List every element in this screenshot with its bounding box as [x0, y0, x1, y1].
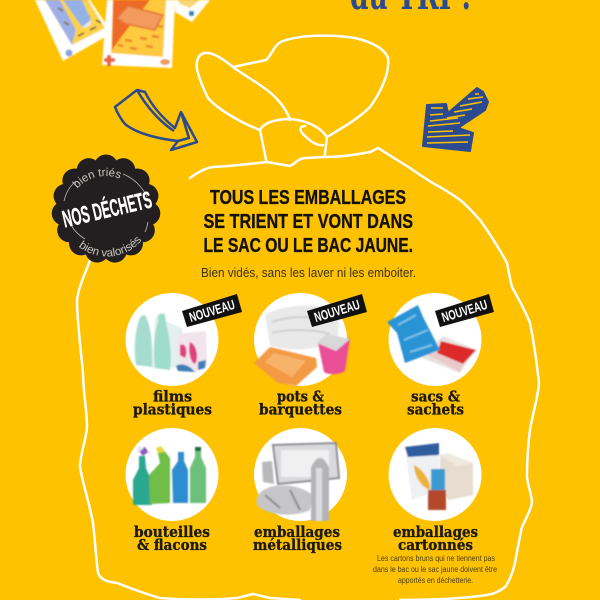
note on brown cartons: Les cartons bruns qui ne tiennent pas: [377, 554, 495, 563]
badge: nos dechets: bien valorisés: [79, 237, 141, 257]
label: [259, 388, 342, 418]
label: [133, 388, 212, 418]
item: emballages metalliques: [253, 428, 347, 554]
item: sacs et sachets: [387, 293, 494, 418]
note on brown cartons: apportés en déchetterie.: [398, 576, 473, 585]
photo: bags and sachets: [387, 293, 482, 386]
badge: nos dechets: NOS DÉCHETS: [60, 186, 155, 233]
item: pots et barquettes: [254, 293, 367, 418]
headline: SE TRIENT ET VONT DANS: [204, 210, 413, 233]
photo: cartons: [388, 428, 482, 521]
label: sachets: [407, 400, 464, 418]
photo: metal packaging: [254, 428, 347, 521]
label: emballages: [254, 523, 340, 541]
label: [253, 523, 342, 554]
subheading: Bien vidés, sans les laver ni les emboiter.: [201, 265, 416, 280]
label: & flacons: [137, 536, 207, 554]
new tag: NOUVEAU: [440, 297, 489, 325]
photo: plastic films: [126, 293, 218, 386]
label: sacs &: [411, 388, 460, 406]
right striped arrow: [423, 88, 488, 151]
label: pots &: [277, 388, 324, 406]
label: emballages: [393, 523, 478, 541]
label: bouteilles: [134, 523, 210, 541]
photo: pots and trays: [254, 293, 350, 386]
trash bag outline: [77, 36, 539, 600]
headline: [204, 186, 413, 257]
photo: bottles: [126, 428, 218, 521]
label: cartonnés: [398, 536, 473, 554]
badge: nos dechets: [52, 154, 160, 263]
item: films plastiques: [126, 293, 242, 418]
playing cards illustration: [35, 0, 210, 68]
label: films: [153, 388, 192, 406]
new tag: NOUVEAU: [312, 297, 362, 325]
label: métalliques: [253, 536, 342, 554]
badge: nos dechets: bien triés: [72, 168, 121, 188]
label: plastiques: [133, 400, 212, 418]
item: emballages cartonnes: [373, 428, 497, 585]
left hand-drawn arrow: [115, 90, 197, 150]
item: bouteilles et flacons: [126, 428, 218, 554]
label: barquettes: [259, 400, 342, 418]
headline: LE SAC OU LE BAC JAUNE.: [204, 234, 413, 257]
note on brown cartons: [373, 554, 497, 585]
label: [393, 523, 478, 554]
new tag: NOUVEAU: [187, 297, 237, 325]
headline: TOUS LES EMBALLAGES: [210, 186, 406, 209]
label: [407, 388, 464, 418]
note on brown cartons: dans le bac ou le sac jaune doivent être: [373, 565, 497, 574]
label: [134, 523, 210, 554]
scalloped badge background: [50, 154, 162, 265]
